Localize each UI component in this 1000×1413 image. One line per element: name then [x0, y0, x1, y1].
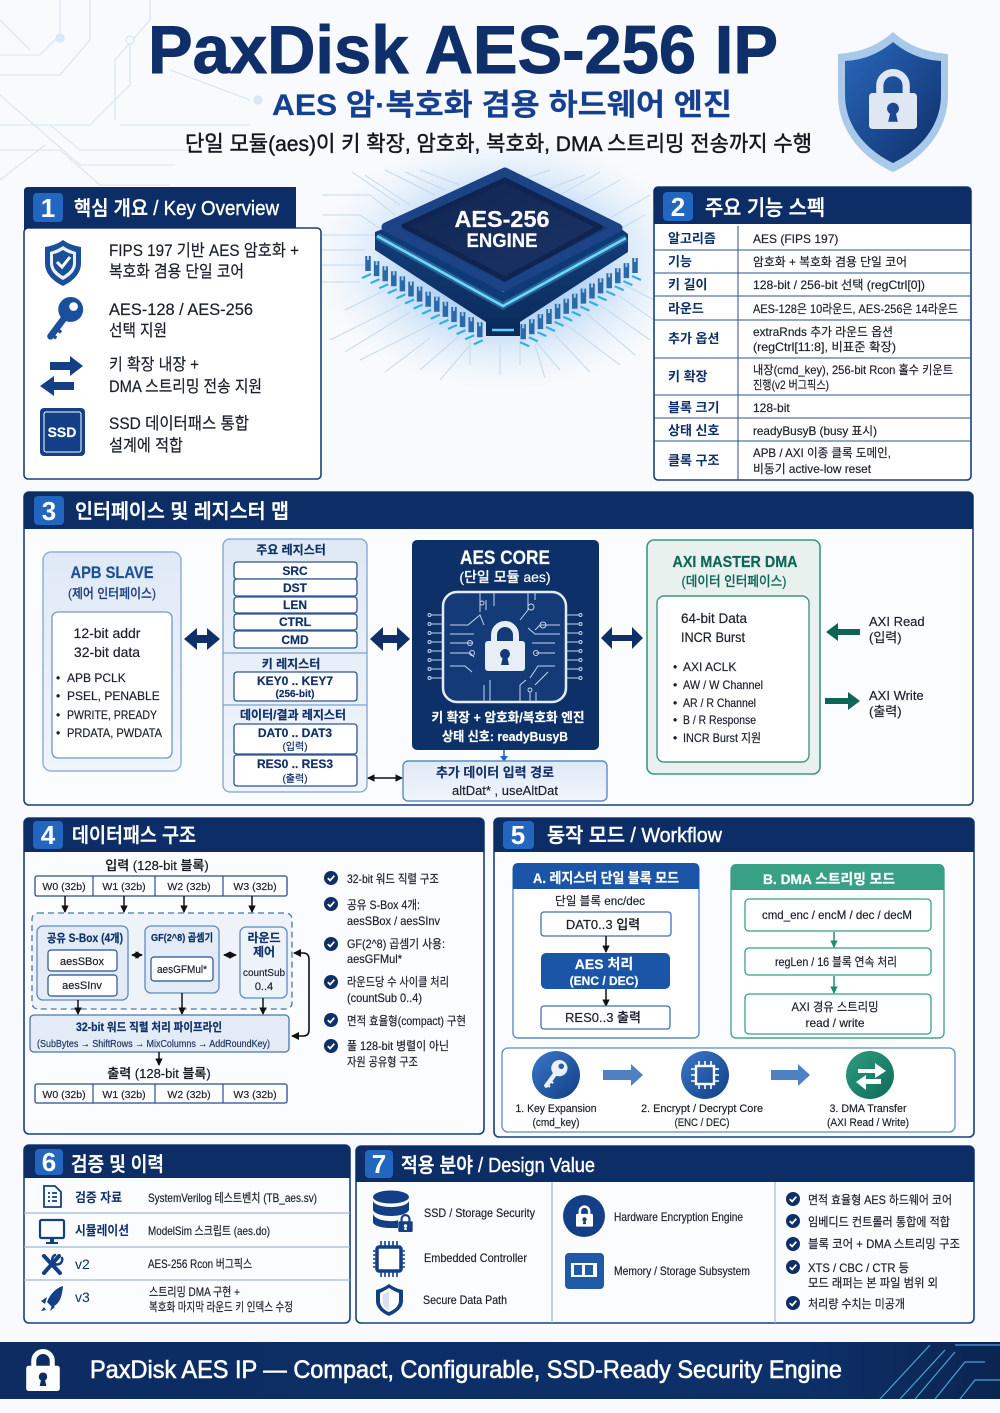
- mode B: AXI 경유 스트리밍: [792, 1000, 878, 1014]
- GF multiplier block: GF(2^8) 곱셈기: [151, 931, 213, 944]
- AES core block: (단일 모듈 aes): [459, 569, 551, 585]
- AXI master DMA box: [647, 540, 820, 774]
- chip top face: [386, 172, 618, 287]
- header 3: [24, 492, 973, 529]
- AXI master DMA box: •: [673, 660, 677, 674]
- icon: shield with lock: [838, 32, 948, 172]
- panel 3: interface and register map: [24, 492, 973, 805]
- panel 5: workflow: [494, 818, 974, 1137]
- AXI master DMA box: •: [673, 678, 677, 692]
- register map: DST: [283, 581, 308, 595]
- table grid: [654, 226, 971, 480]
- APB slave box: •: [56, 708, 60, 722]
- icon: key: [51, 297, 83, 338]
- AXI read arrow and label: [826, 614, 925, 645]
- icon: monitor: [40, 1220, 64, 1244]
- icon: controller chip: [373, 1241, 405, 1277]
- AXI master DMA box: •: [673, 731, 677, 745]
- row labels: [668, 231, 719, 468]
- register map: DAT0 .. DAT3: [258, 726, 332, 740]
- register map: 주요 레지스터: [256, 542, 326, 557]
- AXI master DMA box: •: [673, 696, 677, 710]
- workflow strip: [502, 1048, 955, 1132]
- text: SSD datapath: 설계에 적합: [109, 436, 183, 455]
- icon: rocket: [41, 1286, 63, 1311]
- icon: SSD: [40, 408, 85, 456]
- icon: SSD: SSD: [48, 424, 76, 440]
- row: docs: SystemVerilog 테스트벤치 (TB_aes.sv): [148, 1191, 317, 1205]
- arrows to pipeline: [78, 993, 263, 1014]
- row values: extraRnds 추가 라운드 옵션: [753, 325, 893, 339]
- step labels: 3. DMA Transfer: [830, 1103, 907, 1115]
- register map: KEY0 .. KEY7: [257, 674, 333, 688]
- checklist: design value: 면적 효율형 AES 하드웨어 코어: [808, 1193, 952, 1207]
- AXI master DMA box: AW / W Channel: [683, 678, 763, 692]
- row values: AES (FIPS 197): [753, 232, 838, 246]
- AXI master DMA box: 64-bit Data: [681, 610, 747, 626]
- panel 6: verification and history: [24, 1145, 350, 1323]
- register map: SRC: [282, 564, 308, 578]
- checklist: datapath: 면적 효율형(compact) 구현: [347, 1014, 466, 1028]
- AXI master DMA box: INCR Burst 지원: [683, 731, 761, 745]
- mode B: cmd_enc / encM / dec / decM: [762, 908, 912, 922]
- row labels: 알고리즘: [668, 231, 716, 246]
- chip glow: [313, 134, 693, 390]
- row labels: 키 길이: [668, 277, 708, 292]
- register map: CMD: [281, 633, 309, 647]
- heading 6: 검증 및 이력: [71, 1153, 164, 1176]
- checklist: datapath: 풀 128-bit 병렬이 아닌: [347, 1039, 449, 1053]
- checklist: design value: 블록 코어 + DMA 스트리밍 구조: [808, 1237, 960, 1251]
- row labels: 블록 크기: [668, 400, 719, 415]
- badge 3: 3: [42, 496, 56, 526]
- register map: LEN: [283, 598, 307, 612]
- heading 5: 동작 모드 / Workflow: [547, 824, 723, 847]
- header 6: [24, 1145, 350, 1178]
- input words: W1 (32b): [102, 881, 146, 893]
- AXI master DMA box: AR / R Channel: [683, 696, 756, 710]
- round control block: [240, 927, 287, 998]
- AXI master DMA box: AXI ACLK: [683, 660, 736, 674]
- text: embedded controller: Embedded Controller: [424, 1251, 527, 1265]
- row: v3: 스트리밍 DMA 구현 +: [149, 1285, 240, 1299]
- heading 2: 주요 기능 스펙: [705, 197, 825, 220]
- badge 5: [503, 820, 534, 850]
- icon: shield: [376, 1284, 403, 1316]
- row values: 진행(v2 버그픽스): [753, 377, 829, 392]
- AXI write arrow and label: (출력): [869, 704, 902, 719]
- input words: W2 (32b): [167, 881, 211, 893]
- text: FIPS 197: 복호화 겸용 단일 코어: [109, 262, 244, 281]
- output words: W3 (32b): [233, 1089, 277, 1101]
- input words: W3 (32b): [233, 881, 277, 893]
- row labels: 기능: [668, 254, 692, 269]
- header 1: [24, 187, 296, 231]
- badge 3: [34, 496, 64, 526]
- input words: [35, 858, 287, 896]
- arrow step 2: [771, 1064, 810, 1086]
- text: FIPS 197: FIPS 197 기반 AES 암호화 +: [109, 241, 299, 260]
- text: key expansion: DMA 스트리밍 전송 지원: [109, 377, 262, 396]
- APB slave box: PWRITE, PREADY: [67, 708, 157, 722]
- row labels: 추가 옵션: [668, 331, 719, 346]
- row labels: 라운드: [668, 301, 704, 316]
- row values: AES-128은 10라운드, AES-256은 14라운드: [753, 302, 958, 316]
- APB slave box: APB SLAVE: [70, 563, 154, 582]
- row: simulation: [75, 1223, 270, 1238]
- mode B: read / write: [806, 1016, 865, 1030]
- step labels: 1. Key Expansion: [516, 1103, 596, 1115]
- chip: AES-256 engine: ENGINE: [466, 231, 538, 252]
- text: FIPS 197: [109, 241, 299, 281]
- checklist: design value: 처리량 수치는 미공개: [808, 1297, 905, 1311]
- chip side: [375, 228, 628, 308]
- checklist: design value: XTS / CBC / CTR 등: [808, 1261, 909, 1275]
- mode A: RES0..3 출력: [565, 1010, 641, 1025]
- AES core block: AES CORE: [460, 548, 550, 569]
- AXI master DMA box: •: [673, 713, 677, 727]
- mode A: AES 처리: [575, 956, 633, 972]
- title: PaxDisk AES-256 IP: [148, 12, 778, 88]
- AXI master DMA box: INCR Burst: [681, 629, 745, 645]
- AES core block: [412, 540, 599, 750]
- checklist: datapath: [324, 871, 466, 1069]
- row: v2: AES-256 Rcon 버그픽스: [148, 1257, 252, 1271]
- row labels: 클록 구조: [668, 453, 719, 468]
- register map: [223, 539, 367, 792]
- heading 3: 인터페이스 및 레지스터 맵: [75, 500, 289, 523]
- arrow: APB to registers: [184, 628, 220, 650]
- step labels: 2. Encrypt / Decrypt Core: [641, 1103, 763, 1115]
- text: SSD security: SSD / Storage Security: [424, 1206, 535, 1220]
- text: AES-128/256: [109, 301, 253, 340]
- APB slave box: 12-bit addr: [74, 625, 141, 641]
- AXI write arrow and label: [825, 688, 924, 719]
- AXI read arrow and label: (입력): [869, 630, 902, 645]
- AXI master DMA box: B / R Response: [683, 713, 756, 727]
- badge 6: [35, 1147, 63, 1177]
- footer text: PaxDisk AES IP — Compact, Configurable, SSD-Ready Security Engine: [90, 1356, 842, 1384]
- text: AES-128/256: 선택 지원: [109, 321, 167, 340]
- pipeline block: [30, 1015, 289, 1052]
- checklist: datapath: 32-bit 워드 직렬 구조: [347, 872, 439, 886]
- badge 4: [33, 820, 63, 850]
- extra data path box: 추가 데이터 입력 경로: [436, 765, 554, 780]
- round control block: 제어: [253, 944, 275, 959]
- header 5: [494, 818, 974, 852]
- checklist: datapath: GF(2^8) 곱셈기 사용:: [347, 937, 445, 951]
- chip label: AES-256: [454, 206, 550, 232]
- checklist: datapath: (countSub 0..4): [347, 991, 422, 1005]
- badge 5: 5: [511, 820, 525, 850]
- extra data path box: [368, 750, 607, 801]
- register map: (256-bit): [276, 689, 314, 700]
- badge 2: 2: [671, 192, 685, 222]
- header 2: [654, 187, 971, 224]
- mode A: 단일 블록 enc/dec: [555, 894, 645, 908]
- arrow: registers to core: [370, 627, 410, 651]
- header 7: [356, 1146, 974, 1182]
- extra data path box: altDat* , useAltDat: [452, 783, 558, 798]
- heading 7: 적용 분야 / Design Value: [401, 1154, 595, 1177]
- row: docs: [75, 1190, 317, 1205]
- AXI read arrow and label: AXI Read: [869, 614, 925, 629]
- arrow step 1: [603, 1064, 643, 1086]
- shared logic dashed group: [32, 913, 292, 1009]
- AXI master DMA box: (데이터 인터페이스): [682, 574, 786, 589]
- output words: 출력 (128-bit 블록): [107, 1066, 211, 1081]
- footer circuit decoration: [880, 1345, 1000, 1399]
- icon: memory: [565, 1253, 604, 1289]
- icon: key circle: [532, 1051, 580, 1099]
- output words: [35, 1066, 287, 1103]
- step labels: [516, 1103, 909, 1129]
- AXI write arrow and label: AXI Write: [869, 688, 924, 703]
- mode B: [731, 864, 944, 1038]
- chip: AES-256 engine: [362, 172, 641, 346]
- row: v3: 복호화 마지막 라운드 키 인덱스 수정: [149, 1300, 293, 1314]
- register map: CTRL: [279, 615, 311, 629]
- row: v2: [75, 1256, 252, 1272]
- text: AES-128/256: AES-128 / AES-256: [109, 301, 253, 319]
- subtitle: AES 암·복호화 겸용 하드웨어 엔진: [272, 89, 732, 122]
- badge 1: 1: [41, 193, 55, 223]
- APB slave box: •: [56, 671, 60, 685]
- panel 7: design value: [356, 1146, 974, 1323]
- mode B: B. DMA 스트리밍 모드: [763, 871, 895, 887]
- checklist: datapath: 공유 S-Box 4개:: [347, 898, 420, 912]
- register map: 키 레지스터: [262, 656, 320, 671]
- text: memory subsystem: Memory / Storage Subsystem: [614, 1264, 750, 1278]
- chip base: [375, 236, 628, 336]
- APB slave box: APB PCLK: [67, 671, 126, 685]
- mode A: (ENC / DEC): [570, 974, 638, 988]
- icon: swap circle: [846, 1051, 894, 1099]
- round control block: 라운드: [247, 931, 281, 945]
- header 4: [24, 818, 484, 852]
- AXI master DMA box: AXI MASTER DMA: [672, 554, 798, 571]
- AES core block: 키 확장 + 암호화/복호화 엔진: [432, 710, 584, 725]
- heading 4: 데이터패스 구조: [72, 824, 196, 847]
- chip pins: [362, 256, 641, 346]
- footer banner: [0, 1342, 1000, 1399]
- AES core block: 상태 신호: readyBusyB: [442, 729, 568, 744]
- APB slave box: PRDATA, PWDATA: [67, 726, 162, 740]
- panel 1: key overview: [24, 187, 321, 479]
- arrow: core to AXI: [601, 627, 643, 649]
- checklist: datapath: aesGFMul*: [347, 952, 402, 966]
- row values: 128-bit / 256-bit 선택 (regCtrl[0]): [753, 278, 925, 292]
- GF multiplier block: [145, 926, 219, 993]
- row values: 암호화 + 복호화 겸용 단일 코어: [753, 255, 907, 269]
- output words: W1 (32b): [102, 1089, 146, 1101]
- tagline: 단일 모듈(aes)이 키 확장, 암호화, 복호화, DMA 스트리밍 전송까지 수행: [185, 132, 812, 156]
- text: secure data path: Secure Data Path: [423, 1293, 507, 1307]
- row values: 비동기 active-low reset: [753, 462, 872, 476]
- row values: APB / AXI 이종 클록 도메인,: [753, 446, 891, 460]
- text: SSD datapath: SSD 데이터패스 통합: [109, 414, 249, 433]
- checklist: design value: 임베디드 컨트롤러 통합에 적합: [808, 1215, 950, 1229]
- output words: W0 (32b): [42, 1089, 86, 1101]
- row: v3: [75, 1285, 293, 1314]
- circuit lock frame: [428, 592, 582, 702]
- icon: shield check: [45, 240, 81, 286]
- icon: document: [44, 1186, 61, 1207]
- input words: W0 (32b): [42, 881, 86, 893]
- badge 1: [33, 193, 63, 223]
- row values: 128-bit: [753, 401, 790, 415]
- mode B: regLen / 16 블록 연속 처리: [775, 955, 897, 969]
- badge 7: [365, 1149, 393, 1179]
- S-Box block: 공유 S-Box (4개): [47, 932, 123, 945]
- footer lock: [26, 1352, 60, 1391]
- APB slave box: •: [56, 689, 60, 703]
- register map: (출력): [282, 773, 308, 785]
- icon: chip circle: [681, 1051, 729, 1099]
- row: simulation: 시뮬레이션: [75, 1223, 129, 1238]
- checklist: datapath: aesSBox / aesSInv: [347, 914, 440, 928]
- text: key expansion: [109, 355, 262, 396]
- row values: 내장(cmd_key), 256-bit Rcon 홀수 키운트: [753, 363, 953, 377]
- checklist: design value: 모드 래퍼는 본 파일 범위 외: [808, 1276, 938, 1290]
- row values: [753, 232, 958, 476]
- input words: 입력 (128-bit 블록): [105, 858, 209, 873]
- mode A: [513, 863, 699, 1038]
- badge 6: 6: [42, 1147, 56, 1177]
- S-Box block: aesSInv: [62, 980, 102, 992]
- register map: (입력): [282, 740, 308, 753]
- APB slave box: PSEL, PENABLE: [67, 689, 160, 703]
- row values: (regCtrl[11:8], 비표준 확장): [753, 340, 896, 354]
- GF multiplier block: aesGFMul*: [157, 964, 208, 976]
- row: simulation: ModelSim 스크립트 (aes.do): [148, 1224, 270, 1238]
- badge 2: [663, 192, 693, 222]
- panel 2: feature spec table: [654, 187, 971, 480]
- S-Box block: aesSBox: [60, 956, 105, 968]
- row labels: 키 확장: [668, 369, 708, 384]
- checklist: datapath: 자원 공유형 구조: [347, 1055, 418, 1069]
- icon: lock circle: [563, 1195, 605, 1237]
- chip circuit traces: [322, 170, 654, 380]
- output words: W2 (32b): [167, 1089, 211, 1101]
- register map: 데이터/결과 레지스터: [240, 707, 346, 722]
- heading 1: 핵심 개요 / Key Overview: [74, 197, 280, 220]
- pipeline block: 32-bit 워드 직렬 처리 파이프라인: [76, 1020, 222, 1034]
- register map: RES0 .. RES3: [257, 757, 333, 771]
- text: key expansion: 키 확장 내장 +: [109, 355, 199, 374]
- round control block: countSub: [243, 967, 285, 979]
- mode A: DAT0..3 입력: [566, 917, 640, 932]
- panel 4: datapath structure: [24, 818, 484, 1134]
- APB slave box: 32-bit data: [74, 644, 140, 660]
- text: hardware encryption: Hardware Encryption Engine: [614, 1210, 743, 1224]
- row labels: 상태 신호: [668, 423, 719, 438]
- icon: tools: [44, 1255, 62, 1273]
- badge 7: 7: [372, 1149, 386, 1179]
- row values: readyBusyB (busy 표시): [753, 424, 877, 438]
- mode A: A. 레지스터 단일 블록 모드: [533, 870, 679, 886]
- APB slave box: [43, 552, 181, 771]
- round control block: 0..4: [255, 981, 273, 993]
- S-Box block: [37, 926, 128, 1000]
- row: docs: 검증 자료: [75, 1190, 122, 1205]
- pipeline block: (SubBytes → ShiftRows → MixColumns → AddRoundKey): [37, 1039, 270, 1050]
- APB slave box: (제어 인터페이스): [68, 586, 156, 601]
- step labels: (AXI Read / Write): [827, 1117, 909, 1129]
- APB slave box: •: [56, 726, 60, 740]
- row: v2: v2: [75, 1256, 90, 1272]
- checklist: datapath: 라운드당 수 사이클 처리: [347, 975, 449, 989]
- input arrows: [65, 896, 252, 912]
- checklist: design value: [786, 1192, 960, 1311]
- badge 4: 4: [41, 820, 56, 850]
- feedback arrow: [292, 953, 309, 1036]
- row: v3: v3: [75, 1289, 90, 1305]
- background circuit traces: [0, 0, 262, 185]
- step labels: (ENC / DEC): [674, 1117, 730, 1129]
- icon: swap arrows: [40, 356, 83, 396]
- text: SSD datapath: [109, 414, 249, 455]
- step labels: (cmd_key): [532, 1117, 580, 1129]
- icon: database lock: [373, 1190, 413, 1232]
